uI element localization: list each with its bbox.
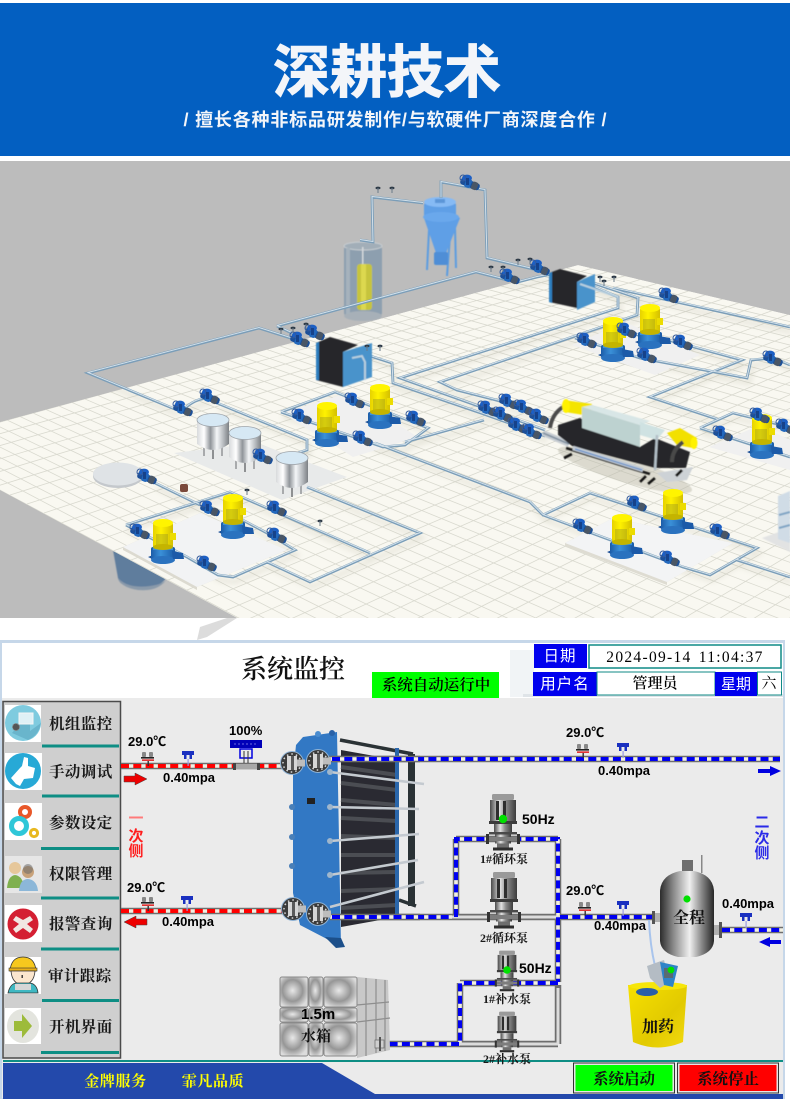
- lower primary instruments: [127, 880, 215, 929]
- footer bar: 霏凡品质: [182, 1072, 244, 1090]
- screen title: 系统监控: [241, 655, 345, 684]
- menu item: 参数设定: 参数设定: [49, 813, 113, 832]
- upper primary instruments: 0.40mpa: [163, 770, 216, 785]
- makeup pump 1: [483, 951, 552, 1006]
- pressure vessel: [652, 855, 722, 957]
- red return arrow: [124, 916, 147, 928]
- menu item: 权限管理: [5, 856, 119, 900]
- status badge: [372, 672, 499, 698]
- menu item: 手动调试: [5, 753, 119, 798]
- title: 深耕技术: [273, 41, 501, 105]
- primary side label: 次: [128, 827, 144, 845]
- process piping: [121, 759, 783, 1044]
- pressure vessel: 全程: [673, 909, 705, 927]
- lower primary instruments: 0.40mpa: [162, 914, 215, 929]
- panel: side menu: [3, 702, 120, 1058]
- underfloor cylinder: [113, 550, 168, 590]
- upper primary instruments: [128, 723, 263, 785]
- menu item: 机组监控: [5, 705, 119, 748]
- date value: [589, 645, 781, 668]
- control valves: [129, 175, 790, 573]
- blue return arrow: [759, 937, 781, 947]
- secondary side label: 二: [754, 814, 770, 831]
- control valve with blue actuator: [230, 740, 262, 770]
- chiller unit: [543, 399, 698, 502]
- dosing unit: 加药: [642, 1017, 674, 1036]
- upper primary instruments: 29.0℃: [128, 734, 166, 749]
- start button: 系统启动: [593, 1069, 655, 1088]
- supply instruments: 29.0℃: [566, 883, 604, 898]
- panel: 3D plant rendering: [0, 161, 790, 1048]
- makeup pump 2: [483, 1012, 531, 1066]
- supply instruments: 0.40mpa: [594, 918, 647, 933]
- menu item: 参数设定: [5, 803, 119, 850]
- vessel outlet instruments: [722, 896, 775, 928]
- heat exchanger 1: [316, 337, 372, 387]
- makeup pump 2: 2#补水泵: [483, 1051, 531, 1066]
- menu item: 手动调试: 手动调试: [49, 762, 113, 781]
- stop button: 系统停止: [697, 1069, 759, 1088]
- stop button: [678, 1063, 778, 1093]
- menu item: 权限管理: 权限管理: [49, 864, 113, 883]
- weekday value: 六: [761, 675, 777, 692]
- user label: 用户名: [540, 675, 590, 693]
- makeup pump 1: 50Hz: [519, 960, 552, 976]
- menu item: 开机界面: 开机界面: [49, 1017, 113, 1036]
- water tank: [280, 977, 390, 1058]
- menu item: 审计跟踪: 审计跟踪: [48, 967, 113, 985]
- primary side label: [128, 810, 144, 860]
- status badge: 系统自动运行中: [382, 676, 490, 694]
- secondary side label: [754, 814, 770, 862]
- plate heat exchanger: [280, 730, 424, 948]
- pump sets: [148, 304, 783, 564]
- water tank: 1.5m: [301, 1006, 335, 1023]
- date value: 2024-09-14 11:04:37: [606, 649, 764, 666]
- secondary side label: 次: [754, 829, 770, 847]
- user value: [597, 672, 715, 695]
- circulation pump 2: [480, 872, 528, 945]
- menu item: 机组监控: 机组监控: [49, 714, 113, 733]
- instrument sensors: [180, 187, 617, 526]
- footer bar: 金牌服务: [84, 1072, 147, 1090]
- circulation pump 1: [480, 794, 555, 866]
- date label: [534, 644, 587, 668]
- gray resin tank with yellow column: [344, 242, 382, 321]
- primary side label: 一: [128, 810, 144, 827]
- wedge below rendering: [197, 618, 237, 640]
- valve position readout: 100%: [229, 723, 263, 738]
- circulation pump 2: 2#循环泵: [480, 930, 528, 945]
- menu item: 报警查询: [5, 905, 119, 950]
- menu item: 审计跟踪: [5, 957, 119, 1002]
- dosing unit: [628, 920, 687, 1048]
- upper secondary instruments: 0.40mpa: [598, 763, 651, 778]
- header banner: [0, 3, 790, 156]
- weekday label: 星期: [721, 676, 751, 693]
- primary side label: 侧: [128, 843, 144, 860]
- red inflow arrow: [124, 773, 147, 785]
- stainless tanks: [197, 414, 308, 497]
- weekday value: [758, 672, 782, 695]
- vessel outlet instruments: 0.40mpa: [722, 896, 775, 911]
- circulation pump 1: 50Hz: [522, 811, 555, 827]
- edge storage unit: [762, 491, 790, 552]
- makeup pump 1: 1#补水泵: [483, 991, 531, 1006]
- footer bar: [3, 1060, 783, 1099]
- heat exchanger 2: [549, 269, 618, 310]
- secondary side label: 侧: [754, 845, 770, 862]
- user label: [533, 672, 597, 696]
- menu item: 开机界面: [5, 1008, 119, 1054]
- water tank: 水箱: [301, 1027, 331, 1045]
- floor with tile grid: [0, 265, 790, 618]
- start button: [574, 1063, 674, 1093]
- circulation pump 1: 1#循环泵: [480, 851, 528, 866]
- weekday label: [715, 672, 757, 696]
- panel: HMI monitoring screen: [0, 640, 785, 1099]
- lower primary instruments: 29.0℃: [127, 880, 165, 895]
- menu item: 报警查询: 报警查询: [49, 914, 113, 933]
- supply instruments: [566, 883, 647, 933]
- upper secondary instruments: 29.0℃: [566, 725, 604, 740]
- user value: 管理员: [632, 674, 679, 692]
- date label: 日期: [543, 647, 577, 665]
- cyclone separator: [423, 197, 460, 276]
- subtitle: / 擅长各种非标品研发制作/与软硬件厂商深度合作 /: [184, 109, 606, 130]
- equipment pads: [93, 322, 790, 590]
- upper secondary instruments: [566, 725, 651, 778]
- blue outflow arrow: [758, 766, 781, 776]
- piping network: [88, 182, 790, 582]
